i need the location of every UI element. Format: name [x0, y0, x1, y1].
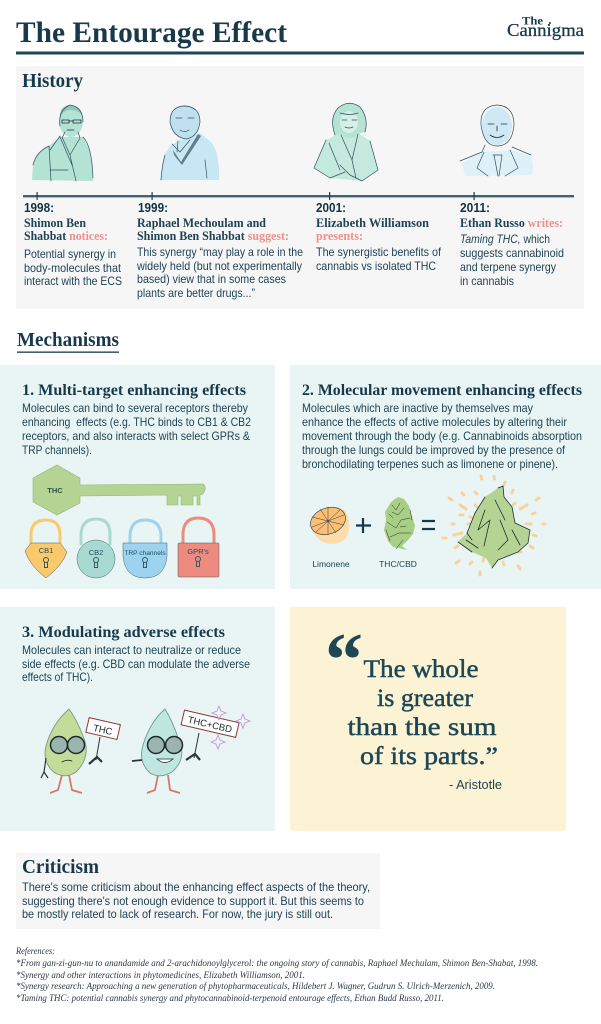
quote text: The whole [364, 656, 478, 683]
portrait: Shimon Ben Shabbat [32, 105, 93, 181]
text: 1998: interact with the ECS [24, 274, 122, 288]
title: The Entourage Effect [16, 16, 287, 49]
character: THC+CBD leaf [132, 706, 250, 793]
quote text [348, 656, 498, 770]
text: 1998: Shimon Ben [24, 216, 86, 230]
text: panel 2: through the lungs could be improved by the presence of [302, 443, 566, 457]
text: panel 3: effects of THC). [22, 670, 93, 684]
text: 2011: and terpene synergy [460, 260, 556, 274]
text: 1998: Potential synergy in [24, 247, 116, 261]
icon: TRP channels lock [123, 520, 167, 578]
panel: multi-target enhancing effects [0, 365, 275, 589]
heading: mechanisms: Mechanisms [17, 330, 119, 351]
text: 1999: Raphael Mechoulam and [137, 216, 266, 230]
references: *Taming THC: potential cannabis synergy and phytocannabinoid-terpenoid entourage effects, Ethan Budd Russo, 2011. [16, 993, 444, 1004]
icon: THC key [33, 465, 205, 515]
heading: history: History [22, 71, 83, 92]
references: References: [15, 946, 55, 957]
icon: glowing bud [443, 476, 545, 575]
text: 1999: plants are better drugs...” [137, 286, 255, 300]
icon: limonene: Limonene [312, 559, 350, 569]
text: panel 3: side effects (e.g. CBD can modulate the adverse [22, 657, 250, 671]
quote text: of its parts.” [360, 743, 498, 770]
quote mark: “ [325, 618, 363, 702]
heading: criticism: Criticism [22, 857, 99, 878]
text: panel 2: Molecules which are inactive by themselves may [302, 401, 533, 415]
panel: history [16, 66, 584, 309]
text: 2001 [316, 200, 442, 273]
icon: sparkles [211, 706, 250, 749]
icon: GPR's lock: GPR's [187, 547, 209, 556]
heading: panel 1: 1. Multi-target enhancing effects [22, 382, 246, 399]
panel: molecular movement enhancing effects [290, 365, 601, 589]
heading: panel 2: 2. Molecular movement enhancing effects [302, 382, 582, 399]
text: 1999: This synergy “may play a role in the [137, 245, 303, 259]
text: 2001: Elizabeth Williamson [316, 216, 429, 230]
text: 1998: 1998: [24, 200, 54, 215]
text: 2001: cannabis vs isolated THC [316, 259, 436, 273]
icon: TRP channels lock: TRP channels [124, 550, 166, 557]
panel: quote [290, 607, 566, 831]
text: 2001: The synergistic benefits of [316, 245, 442, 259]
portrait: Raphael Mechoulam [160, 105, 219, 180]
sign: THC: THC [92, 723, 114, 738]
icon: limonene [307, 503, 350, 569]
icon: CB1 lock [25, 520, 67, 578]
text: panel 1: enhancing effects (e.g. THC binds to CB1 & CB2 [22, 415, 251, 429]
text: panel 3: Molecules can interact to neutralize or reduce [22, 643, 241, 657]
logo: The Cannigma: The [522, 16, 543, 28]
icon: THC/CBD bud: THC/CBD [379, 559, 417, 569]
text: panel 3 [22, 643, 250, 684]
portrait: Ethan Russo [460, 105, 533, 176]
text: 2011: in cannabis [460, 274, 514, 288]
text: panel 1: Molecules can bind to several receptors thereby [22, 401, 248, 415]
text: criticism: There's some criticism about the enhancing effect aspects of the theory, [22, 880, 370, 894]
sign: THC+CBD: THC+CBD [187, 715, 233, 736]
icon: CB2 lock: CB2 [89, 548, 103, 557]
plus sign [356, 518, 371, 533]
references: *From gan-zi-gun-nu to anandamide and 2-arachidonoylglycerol: the ongoing story of cannabis, Raphael Mechulam, Shimon Ben-Shabat, 1998. [16, 958, 538, 969]
quote text: than the sum [348, 714, 497, 741]
text: panel 2: enhance the effects of active molecules by altering their [302, 415, 567, 429]
text: 1999: Shimon Ben Shabbat suggest: [137, 229, 289, 243]
text: 2001: presents: [316, 229, 363, 243]
text: panel 2 [302, 401, 582, 471]
icon: THC/CBD bud [379, 497, 417, 569]
text: 2011: Taming THC, which [460, 232, 550, 246]
icon: CB1 lock: CB1 [39, 546, 53, 555]
text: 2011: suggests cannabinoid [460, 246, 564, 260]
character: THC leaf [41, 709, 120, 793]
text: 2011 [460, 200, 564, 288]
timeline [23, 192, 574, 200]
text: criticism [22, 880, 370, 921]
equals sign [422, 521, 435, 529]
text: 1999: based) view that in some cases [137, 272, 286, 286]
heading: panel 3: 3. Modulating adverse effects [22, 624, 225, 641]
text: 2011: Ethan Russo writes: [460, 216, 563, 230]
text: 1998: body-molecules that [24, 261, 122, 275]
text: 2011: 2011: [460, 200, 490, 215]
references: *Synergy research: Approaching a new generation of phytopharmaceuticals, Hildebert J. Wagner, Gudrun S. Ulrich-Merzenich, 2009. [16, 981, 495, 992]
references: *Synergy and other interactions in phytomedicines, Elizabeth Williamson, 2001. [16, 971, 305, 981]
icon: THC key: THC [47, 486, 63, 495]
icon: GPR's lock [178, 518, 219, 577]
title rule [16, 52, 584, 54]
text: panel 1: TRP channels). [22, 443, 92, 457]
text: panel 2: bronchodilating terpenes such as limonene or pinene). [302, 457, 558, 471]
references [15, 946, 538, 1004]
text: criticism: suggesting there's not enough evidence to support it. But this seems to [22, 894, 364, 908]
text: 1999: 1999: [138, 200, 168, 215]
icon: CB2 lock [77, 519, 115, 578]
panel: modulating adverse effects [0, 607, 275, 831]
portrait: Elizabeth Williamson [314, 103, 378, 181]
quote attribution: - Aristotle [449, 778, 502, 792]
logo: The Cannigma: Cannigma [507, 20, 584, 40]
text: 1998: Shabbat notices: [24, 229, 108, 243]
text: 2001: 2001: [316, 200, 346, 215]
text: 1998 [24, 200, 122, 288]
text: criticism: be mostly related to lack of research. For now, the jury is still out. [22, 907, 333, 921]
text: panel 1 [22, 401, 251, 457]
text: panel 1: receptors, and also interacts with select GPRs & [22, 429, 250, 443]
text: 1999 [136, 200, 303, 300]
text: 1999: widely held (but not experimentally [136, 259, 302, 273]
quote text: is greater [377, 685, 474, 712]
panel: criticism [16, 853, 380, 929]
